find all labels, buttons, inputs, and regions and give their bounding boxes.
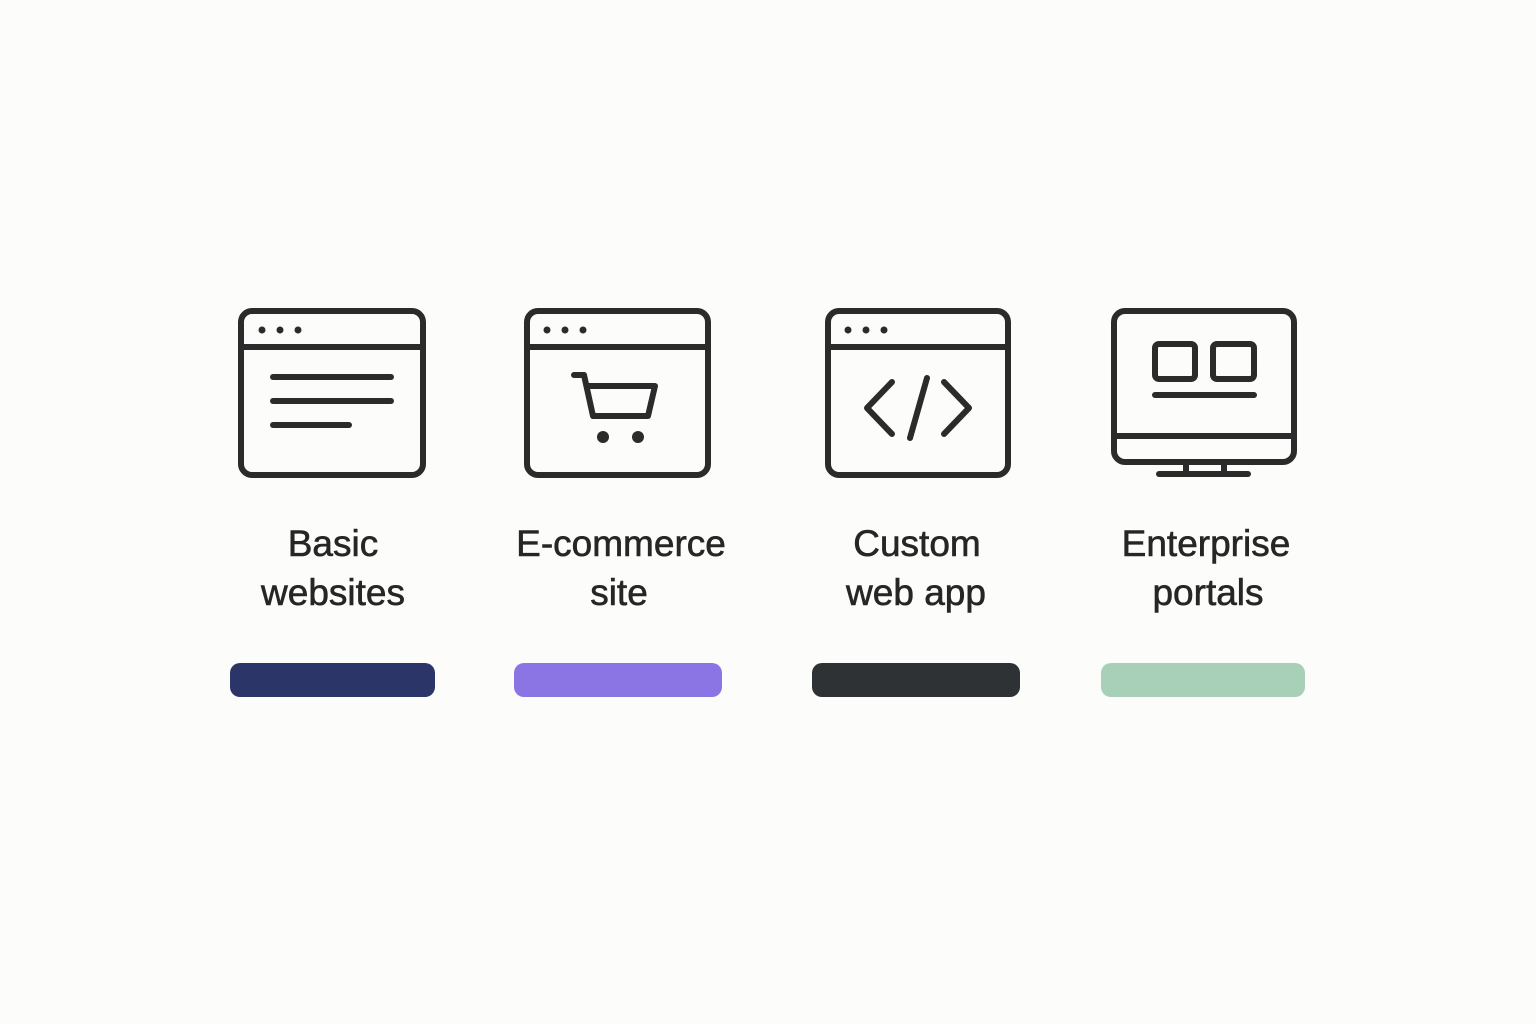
label: Enterprise portals: Enterprise [1122, 523, 1290, 564]
label: Basic websites: Basic [288, 523, 378, 564]
icon: e-commerce browser with cart [527, 311, 708, 475]
label: Basic websites: websites [260, 572, 405, 613]
icon: custom web app code browser [828, 311, 1008, 475]
bar: navy [230, 663, 435, 697]
label: E-commerce site: E-commerce [516, 523, 726, 564]
bar: purple [514, 663, 722, 697]
label: Custom web app: Custom [853, 523, 981, 564]
bar: charcoal [812, 663, 1020, 697]
label: Custom web app: web app [845, 572, 986, 613]
label: E-commerce site: site [590, 572, 648, 613]
icon: basic website browser [241, 311, 423, 475]
icon: enterprise portal monitor [1114, 311, 1294, 474]
bar: mint [1101, 663, 1305, 697]
label: Enterprise portals: portals [1152, 572, 1264, 613]
